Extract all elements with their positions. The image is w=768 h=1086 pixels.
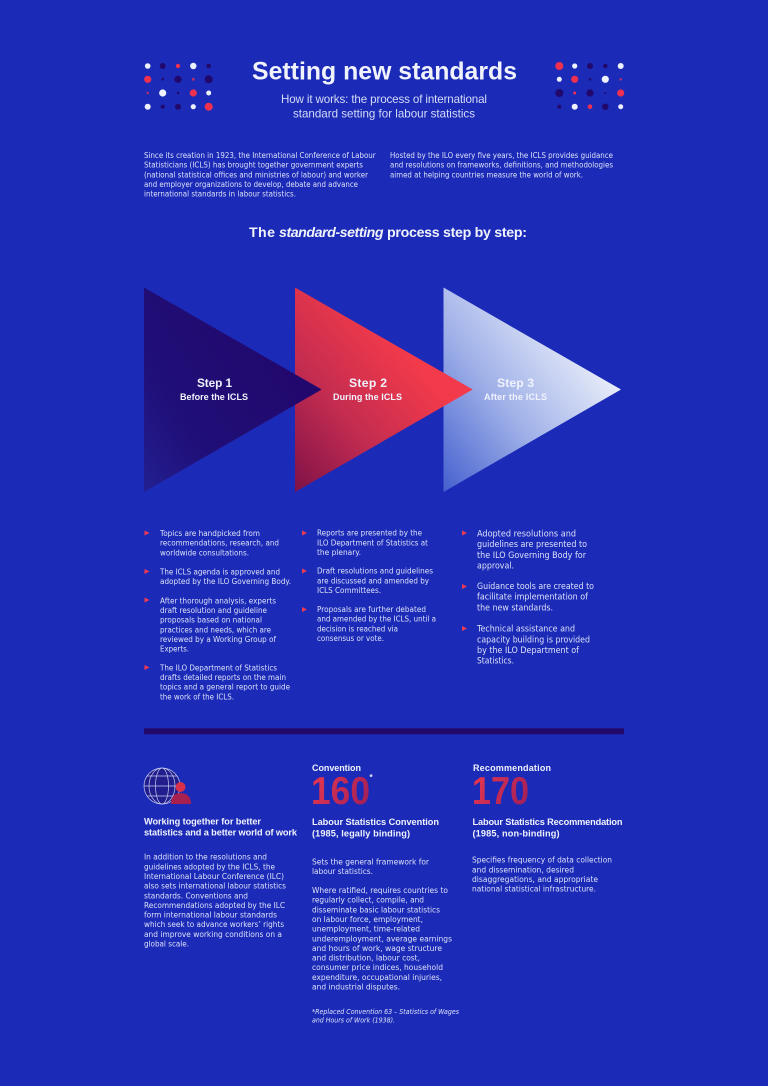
intro text: right: Hosted by the ILO every five years, the ICLS provides guidance bbox=[390, 151, 613, 160]
triangle: step 2 bbox=[295, 288, 473, 492]
step 2 bullet list bbox=[302, 529, 436, 643]
footnote bbox=[312, 1008, 459, 1025]
asterisk: * bbox=[370, 773, 374, 782]
convention body text bbox=[312, 857, 452, 992]
step 1 label: Step 1 bbox=[197, 376, 232, 390]
step 1 label: Before the ICLS bbox=[180, 392, 248, 402]
step 3 label bbox=[484, 376, 547, 402]
panel: recommendation 170 bbox=[472, 763, 623, 894]
step 1 bullet list: proposals based on national bbox=[160, 616, 262, 625]
convention body text: regularly collect, compile, and bbox=[312, 896, 424, 905]
subtitle: How it works: the process of international bbox=[281, 93, 487, 106]
convention body text: expenditure, occupational injuries, bbox=[312, 973, 442, 982]
working together body text: In addition to the resolutions and bbox=[144, 853, 267, 862]
intro text: right: aimed at helping countries measure the world of work. bbox=[390, 170, 583, 179]
step 2 bullet list: ICLS Committees. bbox=[317, 586, 381, 595]
convention body text: labour statistics. bbox=[312, 867, 373, 876]
icon: globe and person bbox=[144, 768, 191, 804]
step 2 bullet list: the plenary. bbox=[317, 548, 361, 557]
step 1 bullet list: adopted by the ILO Governing Body. bbox=[160, 577, 291, 586]
step 1 bullet list: After thorough analysis, experts bbox=[160, 596, 276, 605]
convention body text: Sets the general framework for bbox=[312, 857, 430, 866]
working together body text bbox=[144, 853, 286, 948]
step 2 bullet list: ILO Department of Statistics at bbox=[317, 538, 428, 547]
step 1 bullet list: reviewed by a Working Group of bbox=[160, 635, 276, 644]
intro text: left: Statisticians (ICLS) has brought together government experts bbox=[144, 161, 363, 170]
convention body text: consumer price indices, household bbox=[312, 963, 443, 972]
step 2 bullet list: decision is reached via bbox=[317, 624, 398, 633]
step 1 bullet list: The ICLS agenda is approved and bbox=[159, 567, 280, 576]
step 3 bullet list: Adopted resolutions and bbox=[477, 530, 576, 540]
step 2 bullet list: and amended by the ICLS, until a bbox=[317, 615, 436, 624]
step 3 bullet list: Guidance tools are created to bbox=[477, 582, 594, 592]
panel: working together: Working together for better bbox=[144, 816, 261, 826]
recommendation title bbox=[472, 817, 623, 838]
title: Setting new standards bbox=[252, 58, 517, 86]
step 1 bullet list: draft resolution and guideline bbox=[160, 606, 267, 615]
step 3 bullet list: the new standards. bbox=[477, 603, 553, 613]
intro text: left: Since its creation in 1923, the International Conference of Labour bbox=[144, 151, 376, 160]
step 3 bullet list: Statistics. bbox=[477, 657, 514, 667]
intro text: left: (national statistical offices and ministries of labour) and worker bbox=[144, 170, 369, 179]
convention title: (1985, legally binding) bbox=[312, 828, 410, 838]
divider bar bbox=[144, 728, 624, 734]
triangle: step 1 bbox=[144, 288, 322, 492]
step 1 bullet list: topics and a general report to guide bbox=[160, 683, 290, 692]
step 2 bullet list: Proposals are further debated bbox=[317, 605, 426, 614]
step 3 label: After the ICLS bbox=[484, 392, 547, 402]
number 160: 160 bbox=[311, 770, 370, 813]
subtitle: standard setting for labour statistics bbox=[293, 107, 475, 120]
step 2 bullet list: Draft resolutions and guidelines bbox=[317, 567, 433, 576]
footnote: and Hours of Work (1938). bbox=[312, 1017, 395, 1025]
step 3 bullet list bbox=[462, 530, 594, 667]
step 3 bullet list: facilitate implementation of bbox=[477, 593, 589, 603]
step 3 bullet list: Technical assistance and bbox=[476, 625, 575, 635]
step 1 bullet list bbox=[144, 529, 291, 701]
number 170: 170 bbox=[472, 770, 529, 813]
working together body text: form international labour standards bbox=[144, 911, 277, 920]
recommendation title: (1985, non-binding) bbox=[472, 828, 560, 838]
recommendation body text: national statistical infrastructure. bbox=[472, 885, 596, 894]
intro text: left: and employer organizations to develop, debate and advance bbox=[144, 180, 358, 189]
step 2 bullet list: Reports are presented by the bbox=[317, 529, 422, 538]
step 1 bullet list: Topics are handpicked from bbox=[159, 529, 260, 538]
heading: step by step bbox=[249, 225, 527, 241]
recommendation body text: disaggregations, and appropriate bbox=[472, 875, 598, 884]
step 1 bullet list: recommendations, research, and bbox=[160, 539, 279, 548]
working together body text: guidelines adopted by the ICLS, the bbox=[144, 862, 275, 871]
working together body text: which seek to advance workers’ rights bbox=[144, 920, 284, 929]
step 3 bullet list: the ILO Governing Body for bbox=[477, 551, 586, 561]
recommendation body text: Specifies frequency of data collection bbox=[472, 856, 612, 865]
step 1 bullet list: the work of the ICLS. bbox=[160, 692, 234, 701]
step 1 bullet list: practices and needs, which are bbox=[160, 625, 271, 634]
panel: recommendation 170: Recommendation bbox=[473, 763, 551, 773]
step 3 bullet list: guidelines are presented to bbox=[477, 540, 587, 550]
working together body text: and improve working conditions on a bbox=[144, 930, 282, 939]
convention body text: unemployment, time-related bbox=[312, 925, 420, 934]
intro text: left: international standards in labour statistics. bbox=[144, 190, 296, 199]
working together body text: Recommendations adopted by the ILC bbox=[144, 901, 286, 910]
footnote: *Replaced Convention 63 – Statistics of Wages bbox=[312, 1008, 459, 1016]
step 1 bullet list: Experts. bbox=[160, 645, 189, 654]
step 1 bullet list: worldwide consultations. bbox=[160, 548, 249, 557]
step 2 label bbox=[333, 376, 402, 402]
convention body text: and hours of work, wage structure bbox=[312, 944, 442, 953]
heading: step by step: standard-setting bbox=[279, 225, 384, 241]
intro text: right: and resolutions on frameworks, definitions, and methodologies bbox=[390, 161, 613, 170]
heading: step by step: process step by step: bbox=[387, 225, 527, 241]
step 2 bullet list: consensus or vote. bbox=[317, 634, 384, 643]
icon: right dot pattern bbox=[555, 62, 624, 110]
convention body text: Where ratified, requires countries to bbox=[312, 886, 448, 895]
convention title bbox=[312, 817, 439, 838]
intro text: left bbox=[144, 151, 376, 199]
heading: step by step: The bbox=[249, 225, 275, 241]
step 3 bullet list: approval. bbox=[477, 562, 514, 572]
step 3 bullet list: capacity building is provided bbox=[477, 635, 590, 645]
triangle: step 3 bbox=[444, 288, 621, 492]
step 2 bullet list: are discussed and amended by bbox=[317, 576, 429, 585]
intro text: right bbox=[390, 151, 613, 179]
step 3 bullet list: by the ILO Department of bbox=[477, 646, 580, 656]
panel: working together bbox=[144, 816, 298, 948]
working together body text: International Labour Conference (ILC) bbox=[144, 872, 284, 881]
step 2 label: Step 2 bbox=[349, 376, 387, 390]
step 2 label: During the ICLS bbox=[333, 392, 402, 402]
step 1 bullet list: The ILO Department of Statistics bbox=[159, 663, 277, 672]
step 3 label: Step 3 bbox=[497, 376, 534, 390]
recommendation body text: and dissemination, desired bbox=[472, 865, 574, 874]
panel: convention 160 bbox=[311, 763, 459, 1025]
step 1 bullet list: drafts detailed reports on the main bbox=[160, 673, 286, 682]
convention body text: on labour force, employment, bbox=[312, 915, 423, 924]
convention body text: underemployment, average earnings bbox=[312, 934, 452, 943]
recommendation body text bbox=[472, 856, 612, 894]
step 1 label bbox=[180, 376, 248, 402]
panel: working together: statistics and a better world of work bbox=[144, 828, 298, 838]
working together body text: global scale. bbox=[144, 940, 189, 948]
recommendation title: Labour Statistics Recommendation bbox=[472, 817, 623, 827]
convention body text: and industrial disputes. bbox=[312, 982, 400, 992]
working together body text: also sets international labour statistics bbox=[144, 882, 286, 891]
convention body text: disseminate basic labour statistics bbox=[312, 905, 440, 914]
convention body text: and distribution, labour cost, bbox=[312, 954, 420, 963]
subtitle bbox=[281, 93, 487, 120]
convention title: Labour Statistics Convention bbox=[312, 817, 439, 827]
working together body text: standards. Conventions and bbox=[144, 891, 248, 900]
icon: left dot pattern bbox=[144, 63, 213, 111]
panel: convention 160: Convention bbox=[312, 763, 361, 773]
